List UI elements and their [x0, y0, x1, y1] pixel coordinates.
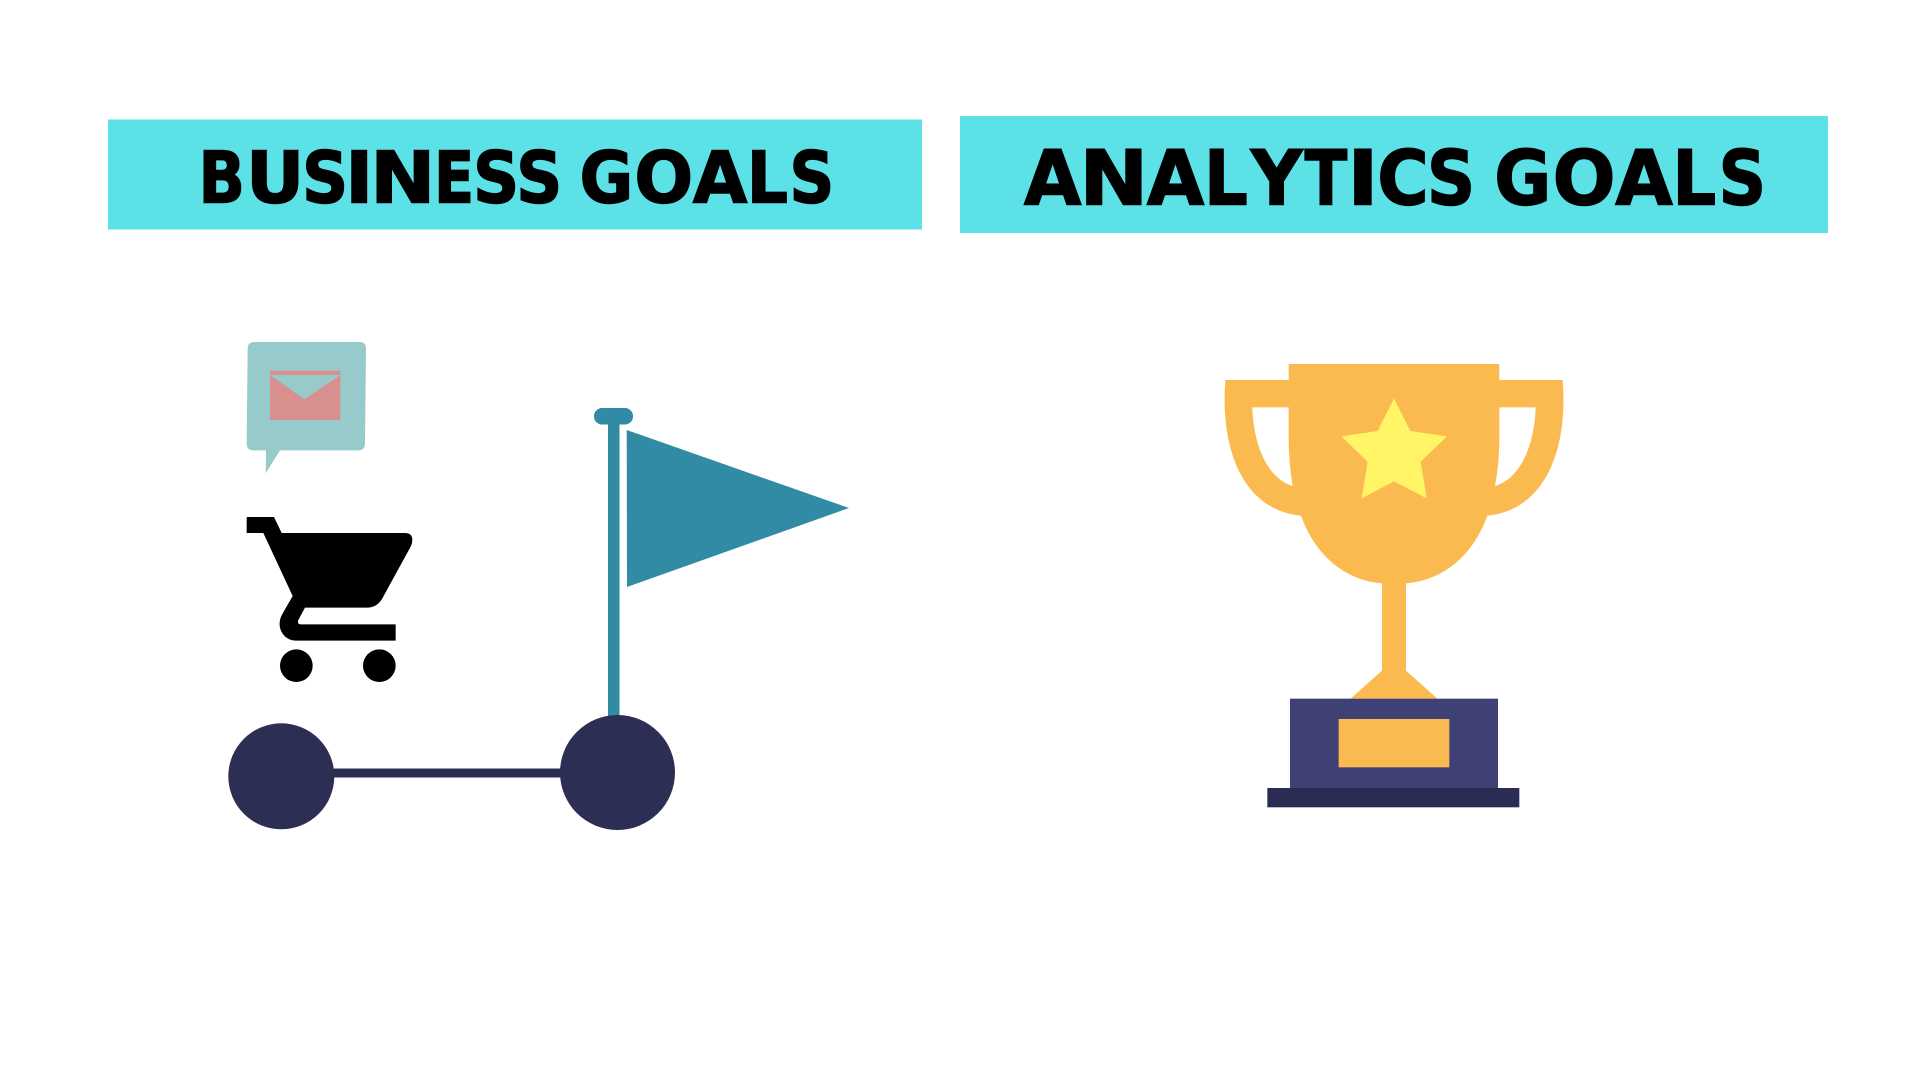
trophy star [1341, 398, 1447, 498]
heading: business goals: L [747, 136, 788, 220]
heading: business goals: S [789, 136, 834, 220]
panel: analytics goals banner [960, 116, 1828, 233]
heading: analytics goals: T [1305, 134, 1347, 222]
heading: business goals: O [634, 136, 693, 220]
heading: analytics goals: I [1347, 134, 1379, 222]
trophy base [1267, 699, 1519, 807]
icon: shopping cart [247, 517, 412, 682]
heading: analytics goals: A [1147, 134, 1204, 222]
heading: analytics goals: A [1615, 134, 1673, 222]
heading: business goals: S [302, 136, 348, 220]
icon: connected milestone nodes [228, 715, 675, 830]
heading: business goals: S [473, 136, 519, 220]
heading: business goals: U [246, 136, 304, 220]
heading: analytics goals: L [1672, 134, 1716, 222]
heading: analytics goals: L [1204, 134, 1248, 222]
heading: business goals: G [580, 136, 633, 220]
icon: email speech bubble [247, 342, 366, 473]
heading: analytics goals: C [1377, 134, 1429, 222]
heading: analytics goals: S [1427, 134, 1475, 222]
heading: business goals: A [693, 136, 747, 220]
heading: analytics goals: Y [1250, 134, 1303, 222]
heading: business goals: B [198, 136, 245, 220]
heading: analytics goals: O [1553, 134, 1616, 222]
heading: business goals: N [370, 136, 436, 220]
heading: analytics goals: G [1494, 134, 1551, 222]
trophy handles [1225, 380, 1563, 516]
heading: analytics goals: S [1718, 134, 1766, 222]
heading: business goals: S [516, 136, 562, 220]
panel: business goals banner [108, 120, 922, 230]
heading: analytics goals: A [1024, 134, 1082, 222]
heading: business goals: E [434, 136, 474, 220]
heading: analytics goals: N [1079, 134, 1148, 222]
icon: flag on pole [594, 408, 849, 725]
icon: trophy [1225, 364, 1563, 807]
heading: business goals: I [345, 136, 374, 220]
trophy cup and stem [1289, 364, 1499, 699]
